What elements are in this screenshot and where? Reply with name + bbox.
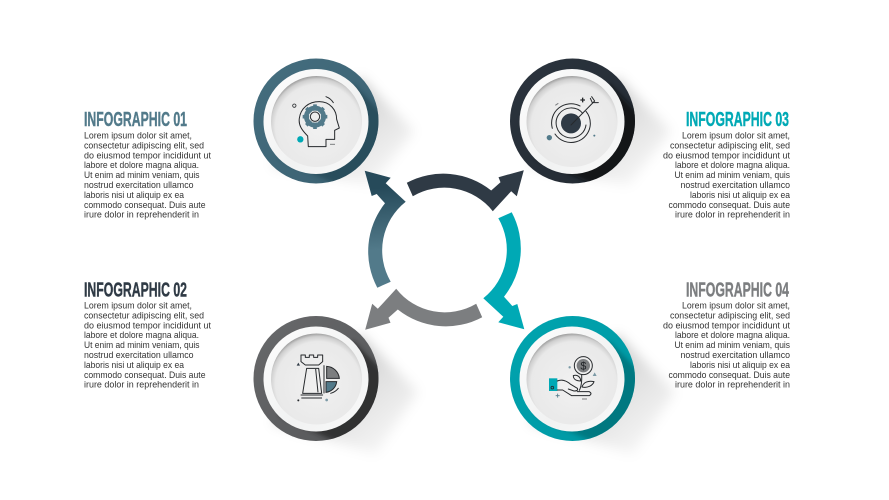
body text 02: Ut enim ad minim veniam, quis [84, 340, 200, 351]
text block: infographic 01 [84, 109, 211, 221]
panel: circle 4 long shadow [529, 334, 675, 454]
body text 03: Lorem ipsum dolor sit amet, [682, 130, 790, 142]
arrow: blue to top left [365, 171, 406, 288]
body text 02: irure dolor in reprehenderit in [84, 380, 199, 391]
icon: head with gear [293, 97, 339, 147]
body text 03: nostrud exercitation ullamco [680, 180, 790, 191]
body text 04: commodo consequat. Duis aute [668, 370, 790, 381]
body text 04: consectetur adipiscing elit, sed [670, 310, 790, 321]
body text 02: nostrud exercitation ullamco [84, 350, 194, 361]
body text 01: commodo consequat. Duis aute [84, 200, 206, 211]
body text 01: labore et dolore magna aliqua. [84, 160, 199, 171]
body text 04: laboris nisi ut aliquip ex ea [690, 360, 791, 371]
body text 01: irure dolor in reprehenderit in [84, 210, 199, 221]
body text 03: irure dolor in reprehenderit in [675, 210, 790, 221]
body text 03: do eiusmod tempor incididunt ut [663, 150, 790, 161]
panel: circle 2 long shadow [272, 334, 418, 454]
heading: infographic 04: INFOGRAPHIC 04 [686, 280, 790, 302]
body text 01: laboris nisi ut aliquip ex ea [84, 190, 185, 201]
body text 02: Lorem ipsum dolor sit amet, [84, 300, 192, 312]
body text 03: Ut enim ad minim veniam, quis [674, 170, 790, 181]
heading: infographic 02: INFOGRAPHIC 02 [84, 280, 187, 302]
chart: central circular arrows [365, 170, 524, 330]
body text 01: nostrud exercitation ullamco [84, 180, 194, 191]
heading: infographic 01: INFOGRAPHIC 01 [84, 109, 187, 131]
panel: circle 3 [510, 58, 635, 184]
icon: chess rook and pie chart [297, 355, 339, 401]
body text 01: Ut enim ad minim veniam, quis [84, 170, 200, 181]
panel: circle 1 [254, 58, 378, 184]
body text 04: Ut enim ad minim veniam, quis [674, 340, 790, 351]
body text 02: consectetur adipiscing elit, sed [84, 310, 204, 321]
panel: circle 3 long shadow [529, 77, 671, 185]
panel: circle 1 long shadow [272, 77, 414, 185]
panel: circle 4 [510, 316, 635, 441]
arrow: dark to top right [407, 170, 524, 211]
body text 01: do eiusmod tempor incididunt ut [84, 150, 211, 161]
icon: target with arrow [547, 97, 598, 142]
icon: hand with money plant: $ [580, 360, 586, 372]
body text 04: Lorem ipsum dolor sit amet, [682, 300, 790, 312]
arrow: teal to bottom right [483, 212, 524, 329]
body text 02: labore et dolore magna aliqua. [84, 330, 199, 341]
body text 04: nostrud exercitation ullamco [680, 350, 790, 361]
body text 03: commodo consequat. Duis aute [668, 200, 790, 211]
body text 04 [663, 300, 791, 391]
arrow: grey to bottom left [365, 289, 482, 330]
panel: circle 2 [254, 316, 378, 441]
body text 03: labore et dolore magna aliqua. [675, 160, 790, 171]
body text 03 [663, 130, 791, 221]
body text 03: laboris nisi ut aliquip ex ea [690, 190, 791, 201]
body text 03: consectetur adipiscing elit, sed [670, 140, 790, 151]
text block: infographic 02 [84, 280, 211, 391]
body text 02 [84, 300, 211, 391]
body text 04: do eiusmod tempor incididunt ut [663, 320, 790, 331]
text block: infographic 03 [663, 109, 791, 221]
body text 02: laboris nisi ut aliquip ex ea [84, 360, 185, 371]
heading: infographic 03: INFOGRAPHIC 03 [686, 109, 789, 131]
body text 01: Lorem ipsum dolor sit amet, [84, 130, 192, 142]
body text 02: do eiusmod tempor incididunt ut [84, 320, 211, 331]
body text 04: irure dolor in reprehenderit in [675, 380, 790, 391]
body text 01: consectetur adipiscing elit, sed [84, 140, 204, 151]
body text 01 [84, 130, 211, 221]
text block: infographic 04 [663, 280, 791, 391]
body text 04: labore et dolore magna aliqua. [675, 330, 790, 341]
body text 02: commodo consequat. Duis aute [84, 370, 206, 381]
